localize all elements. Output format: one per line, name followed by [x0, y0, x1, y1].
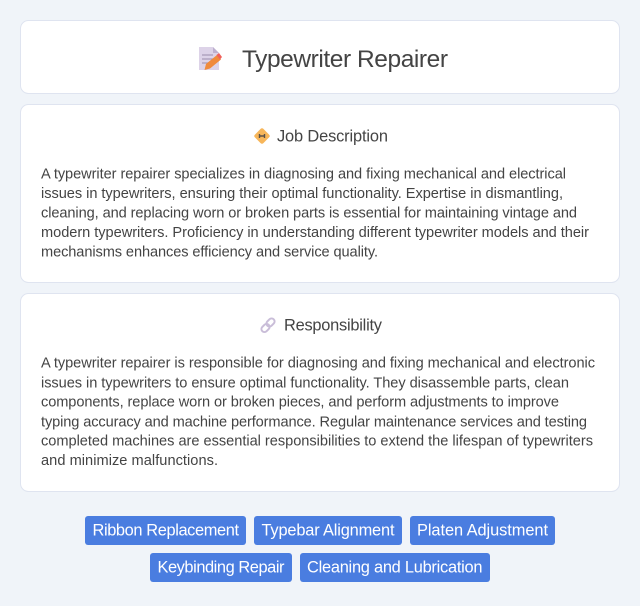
skill tag: keybinding repair: Keybinding Repair [158, 558, 285, 576]
icon: link [260, 317, 276, 333]
heading: title: Typewriter Repairer [242, 46, 448, 73]
text: responsibility: issues in typewriters to ensure optimal functionality. They disassemble parts, clean [41, 376, 569, 392]
text: job description [41, 166, 589, 260]
skill tag: cleaning and lubrication: Cleaning and Lubrication [307, 558, 482, 576]
text: responsibility: A typewriter repairer is responsible for diagnosing and fixing mechanical and electronic [41, 356, 595, 372]
text: job description: mechanisms enhances efficiency and service quality. [41, 244, 378, 260]
panel: title [20, 20, 620, 94]
panel: job description [20, 104, 620, 282]
panel: responsibility [20, 294, 620, 492]
skill tag: ribbon replacement: Ribbon Replacement [92, 522, 239, 540]
text: job description: issues in typewriters, ensuring their optimal functionality. Expertise in dismantling, [41, 186, 563, 202]
text: responsibility: and minimize malfunctions. [41, 453, 218, 469]
skill tag: typebar alignment [254, 516, 402, 545]
text: responsibility: components, replace worn or broken pieces, and perform adjustments to improve [41, 394, 559, 410]
text: job description: A typewriter repairer specializes in diagnosing and fixing mechanical and electrical [41, 166, 566, 182]
text: job description: cleaning, and replacing worn or broken parts is essential for maintaining vintage and [41, 206, 577, 222]
skill tag: platen adjustment: Platen Adjustment [417, 522, 548, 540]
heading: job description: Job Description [277, 128, 388, 146]
skill tag: keybinding repair [150, 553, 292, 582]
text: responsibility: typing accuracy and machine performance. Regular maintenance services and testing [41, 414, 587, 430]
icon: construction diamond [254, 128, 270, 144]
skill tag: cleaning and lubrication [300, 553, 490, 582]
skill tag: platen adjustment [410, 516, 555, 545]
text: responsibility: completed machines are essential responsibilities to extend the lifespan of typewriters [41, 434, 593, 450]
heading: responsibility: Responsibility [284, 316, 383, 334]
skill tag: ribbon replacement [85, 516, 246, 545]
skill tag: typebar alignment: Typebar Alignment [262, 522, 395, 540]
text: job description: modern typewriters. Proficiency in understanding different typewriter models and their [41, 225, 589, 241]
icon: memo with pencil [199, 47, 222, 70]
text: responsibility [41, 356, 595, 469]
